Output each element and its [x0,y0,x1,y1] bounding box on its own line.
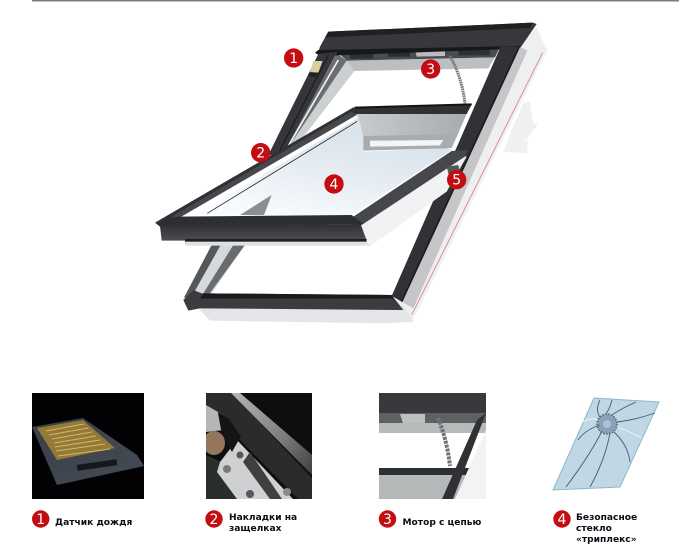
marker 2 [251,143,270,162]
chain [450,56,465,103]
caption 2: защелках [229,524,282,534]
caption 1: Датчик дождя [55,518,132,528]
marker 3: 3 [426,62,435,78]
sash inner reveal [357,110,468,148]
main illustration: roof window [155,23,547,323]
caption 2 [205,510,297,534]
marker 1: 1 [289,51,298,67]
sash front bar [155,215,363,227]
left inner reveal [290,61,354,145]
glass pane [195,117,452,215]
outer white frame [397,27,547,323]
flashing bracket at right [503,102,538,153]
right stile [392,47,519,302]
sash white glazing strip [193,117,357,214]
caption 1: 1 [36,512,45,528]
caption 4: стекло [576,524,612,534]
caption 4: «триплекс» [576,535,637,545]
caption 2: Накладки на [229,513,297,523]
photo 1: rain sensor [32,393,144,499]
caption 3: 3 [383,512,392,528]
top rule [32,0,679,2]
ventilation bar [363,134,455,151]
marker 2: 2 [256,146,265,162]
marker 1 [284,48,303,68]
photo 2: latch covers [203,393,312,499]
caption 2: 2 [210,512,218,528]
hinge block [447,165,462,187]
photo 4: triplex glass [553,398,659,490]
caption 4: 4 [558,512,567,528]
photo 3: motor with chain [379,393,486,499]
caption 3 [379,510,481,528]
grey inner band of frame [402,47,527,308]
marker 5: 5 [452,173,461,189]
inner top reveal and motor [347,57,495,71]
view through opening [240,195,272,215]
caption 4 [553,510,637,545]
sash right rail [348,150,467,225]
sash dark frame left rail [155,104,472,223]
red line on frame [412,53,543,315]
rain sensor [310,61,323,73]
left stile [268,52,337,155]
caption 4: Безопасное [576,513,637,523]
caption 1 [32,510,132,528]
top dark bar [318,23,537,52]
lower window frame [183,245,245,298]
marker 4 [324,174,344,194]
sash white side [350,153,467,245]
caption 3: Мотор с цепью [402,518,481,528]
marker 4: 4 [330,177,339,193]
marker 5 [447,170,466,189]
marker 3 [421,59,440,79]
